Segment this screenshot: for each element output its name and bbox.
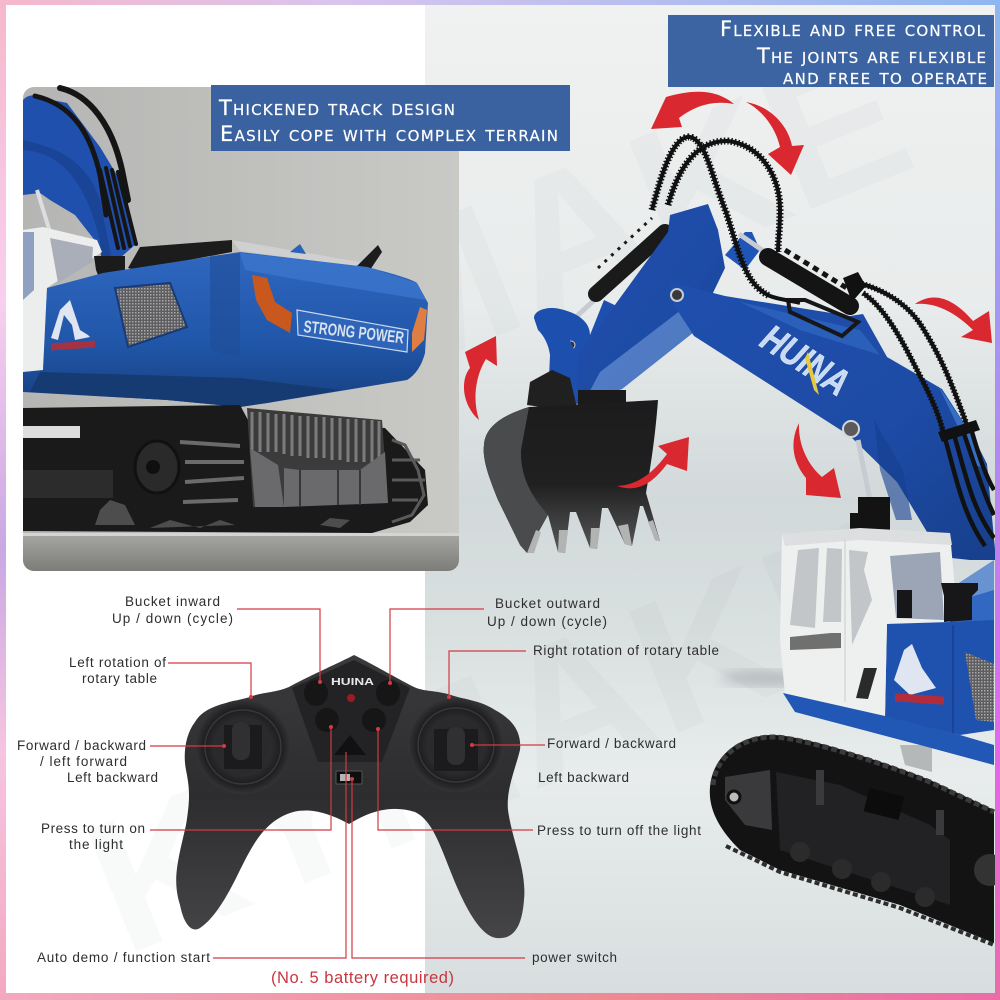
banner: track design: Thickened track design — [218, 96, 455, 120]
orange light right — [412, 307, 427, 352]
excavator decal — [894, 644, 944, 705]
blue lower strip — [783, 693, 994, 765]
exhaust stack — [941, 583, 978, 622]
excavator logo decal — [51, 300, 95, 351]
main track — [710, 735, 1000, 945]
cab — [780, 528, 955, 717]
control labels: Forward / backward — [17, 738, 146, 753]
arrow: top right — [746, 102, 804, 175]
stick cylinder — [596, 232, 665, 294]
bucket tooth tips — [527, 520, 660, 553]
boom in photo — [23, 95, 137, 273]
orange light left — [252, 275, 292, 333]
excavator main — [484, 137, 1000, 945]
sprocket wheel — [135, 441, 244, 502]
left joystick well — [195, 700, 291, 794]
stick hook bracket — [542, 318, 575, 370]
control labels: / left forward — [40, 754, 127, 769]
arrow: inside bucket — [617, 437, 689, 488]
control labels: rotary table — [82, 671, 157, 686]
white cab — [23, 227, 102, 373]
engine cover top — [128, 240, 232, 270]
track side plate — [776, 772, 950, 905]
exhaust stack — [94, 256, 125, 280]
undercarriage and track — [23, 405, 428, 533]
control labels: power switch — [532, 950, 617, 965]
control labels: Forward / backward — [547, 736, 676, 751]
bucket link — [534, 300, 625, 404]
boom arm — [670, 282, 996, 560]
power switch — [336, 771, 362, 784]
track guard fins — [247, 408, 388, 507]
boom pivot pins — [567, 289, 859, 437]
led — [347, 694, 355, 702]
callout dots — [222, 680, 474, 781]
buttons — [304, 680, 328, 706]
arrow: right of boom — [915, 298, 992, 343]
control labels — [17, 594, 719, 965]
control labels: Press to turn off the light — [537, 823, 701, 838]
control labels: Right rotation of rotary table — [533, 643, 719, 658]
hoses in photo — [35, 88, 136, 248]
engine vent mesh — [965, 652, 994, 722]
vent mesh — [115, 283, 187, 347]
arrow: under boom — [793, 423, 841, 498]
strong power plate — [297, 310, 408, 352]
banner: track design: Easily cope with complex terrain — [220, 122, 558, 146]
triangle button — [334, 735, 366, 755]
banner: flexible control: The joints are flexible — [756, 44, 986, 68]
track top gap — [23, 426, 80, 438]
control labels: Up / down (cycle) — [487, 614, 607, 629]
right joystick well — [408, 698, 504, 792]
stick arm — [577, 204, 725, 404]
rear track tread — [392, 440, 425, 522]
engine body — [885, 590, 994, 735]
callout lines — [150, 609, 545, 958]
boom lift rod — [858, 440, 870, 500]
control labels: Left backward — [538, 770, 629, 785]
panel: track detail photo — [23, 87, 459, 571]
track side frame — [23, 470, 113, 498]
cab shadow — [720, 671, 820, 685]
control labels: Bucket inward — [125, 594, 220, 609]
cab windows — [790, 548, 872, 645]
control labels: Up / down (cycle) — [112, 611, 233, 626]
control labels: Press to turn on — [41, 821, 145, 836]
bucket mount — [527, 370, 578, 412]
door handle strip — [790, 632, 841, 650]
drive wheel hub — [728, 791, 740, 803]
cab vent — [856, 668, 877, 699]
handle — [357, 245, 382, 270]
huina logo on boom: HUINA — [753, 317, 856, 405]
control labels: Bucket outward — [495, 596, 600, 611]
watermark text: KYMAKE — [60, 6, 937, 525]
battery note: (No. 5 battery required) — [271, 969, 454, 987]
control labels: Left rotation of — [69, 655, 166, 670]
hydraulic hose bundle — [942, 428, 994, 546]
banner: track design — [211, 85, 570, 151]
bucket — [484, 400, 660, 553]
controller body — [176, 655, 524, 938]
banner: flexible control — [668, 15, 994, 89]
right side studio backdrop — [425, 5, 995, 993]
arrow: top left — [651, 92, 734, 129]
banner: flexible control: and free to operate — [783, 65, 987, 89]
chrome cylinder rod — [37, 190, 50, 232]
banner: flexible control: Flexible and free control — [720, 17, 986, 41]
arrow: left of bucket — [464, 336, 497, 420]
center panel — [292, 660, 410, 762]
track rollers — [790, 842, 810, 862]
remote controller — [176, 655, 524, 938]
control labels: Left backward — [67, 770, 158, 785]
boom back highlight — [725, 232, 760, 270]
control labels: Auto demo / function start — [37, 950, 210, 965]
controller logo: HUINA — [331, 677, 374, 688]
strong power plate: STRONG POWER — [303, 317, 405, 347]
rear body — [23, 252, 428, 407]
boom cylinder — [739, 234, 765, 252]
stick cylinder rod — [577, 284, 612, 316]
control labels: the light — [69, 837, 123, 852]
watermark text: KYMAKE — [60, 476, 937, 995]
hydraulic hoses — [652, 137, 968, 440]
grey chassis patch — [900, 745, 932, 772]
